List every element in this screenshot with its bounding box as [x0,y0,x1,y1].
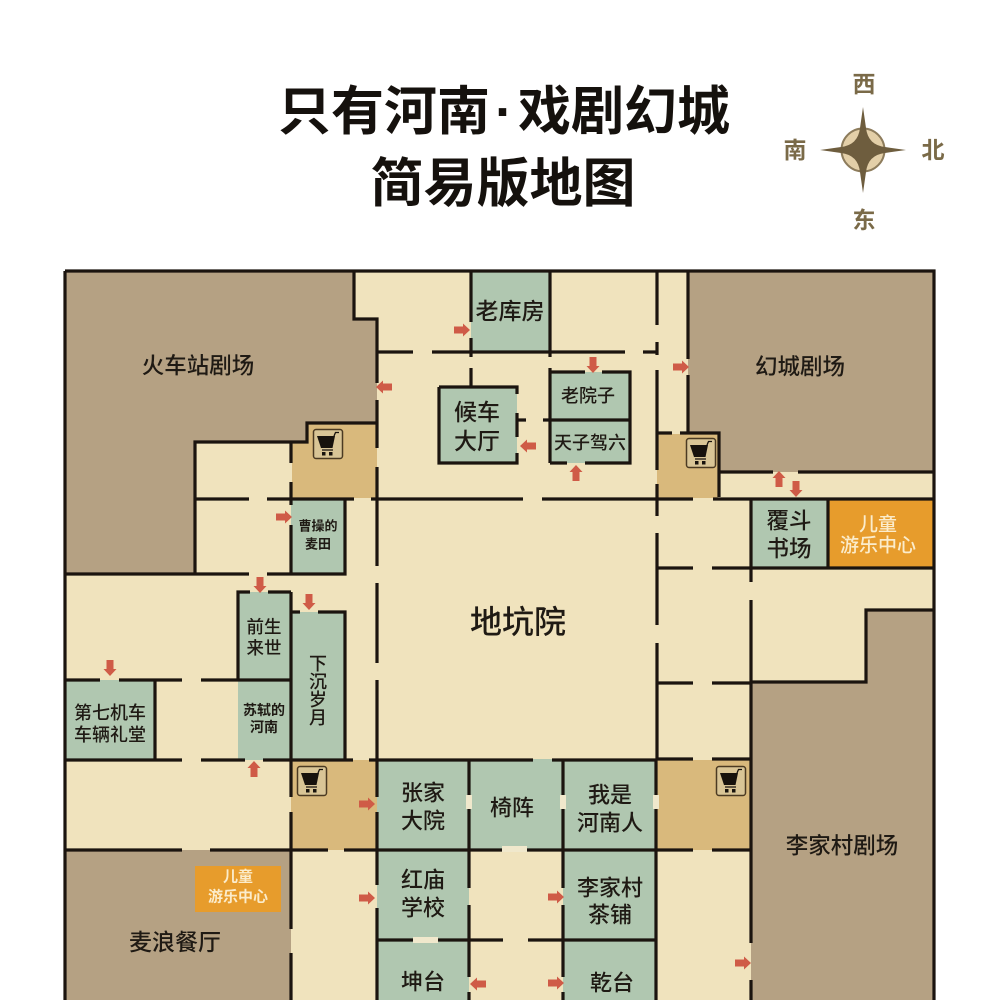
arrow: 张家大院 [359,798,375,810]
room: 李家村茶铺: 李家村 [577,876,643,900]
icon: cart north-west [314,430,342,458]
title: 简易版地图 [370,154,636,214]
shop area: south-east [657,760,751,850]
room: 张家大院: 大院 [401,808,445,834]
room: 下沉岁月: 下 [309,654,327,674]
room: 苏轼的河南 [238,680,291,760]
room: 老院子 [550,372,630,420]
panel: 火车站剧场 [65,271,377,574]
title: 只有河南 [278,82,490,142]
arrow: 幻城剧场 south [772,471,786,487]
icon: cart south-west [298,766,326,796]
room: 曹操的麦田: 曹操的 [298,518,338,534]
panel: 李家村剧场: 李家村剧场 [786,834,898,858]
room: 儿童游乐中心 east [828,499,934,568]
room: 李家村茶铺: 茶铺 [588,902,632,928]
room: 儿童游乐中心 east: 儿童 [859,514,897,536]
arrow: 火车站剧场 [376,380,392,394]
icon: cart south-east [716,766,746,796]
room: 乾台 [563,940,656,1000]
room: 覆斗书场: 书场 [766,536,812,562]
room: 前生来世: 来世 [246,638,282,658]
arrow: 红庙学校 [359,892,375,904]
room: 候车大厅 [439,387,517,463]
room: 儿童游乐中心 west: 游乐中心 [208,888,268,906]
arrow: 天子驾六 [570,465,582,481]
room: 我是河南人: 河南人 [577,810,643,836]
room: 第七机车车辆礼堂: 车辆礼堂 [74,725,146,745]
compass: 东 [852,207,876,233]
panel: 幻城剧场: 幻城剧场 [755,354,845,380]
room: 老库房 [471,271,550,352]
arrow: 李家村茶铺 [548,890,564,904]
room: 下沉岁月: 沉 [309,672,327,692]
room: 天子驾六 [550,420,630,463]
room: 老院子: 老院子 [561,386,615,406]
arrow: 第七机车 [104,660,116,676]
room: 地坑院: 地坑院 [470,604,566,640]
arrow: 老院子 [586,357,600,373]
room: 天子驾六: 天子驾六 [554,433,626,453]
room: 红庙学校: 学校 [401,896,445,920]
room: 儿童游乐中心 west [195,866,281,912]
arrow: 坤台 [470,978,486,990]
title [278,82,730,214]
room: 乾台: 乾台 [590,970,634,996]
room: 下沉岁月: 月 [309,708,327,728]
title: · [495,82,513,142]
room: 张家大院 [377,759,469,849]
arrow: 候车大厅 [520,440,536,452]
arrow: 老库房 [454,324,470,336]
icon: cart north-east [686,438,716,468]
panel: 火车站剧场: 火车站剧场 [142,354,254,378]
room: 坤台 [377,940,469,1000]
room: 曹操的麦田: 麦田 [305,536,331,552]
arrow: 苏轼的河南 [248,761,260,777]
panel: 幻城剧场 [688,271,934,472]
panel: 李家村剧场 [751,610,934,1000]
room: 张家大院: 张家 [401,780,445,806]
room: 曹操的麦田 [291,499,345,574]
room: 第七机车车辆礼堂 [65,680,155,760]
arrow: 覆斗书场 [790,481,802,497]
room: 苏轼的河南: 苏轼的 [243,702,285,718]
arrow: 乾台 [548,976,564,990]
compass: 西 [852,71,876,97]
door highlights [413,795,659,943]
room: 前生来世: 前生 [246,617,282,637]
room: 儿童游乐中心 east: 游乐中心 [840,534,916,556]
title: 戏剧幻城 [518,82,730,142]
room: 我是河南人 [563,759,656,849]
room: 下沉岁月: 岁 [309,690,327,710]
room: 椅阵 [469,759,563,849]
room: 老库房: 老库房 [476,298,544,324]
walls [65,271,934,1000]
panel: 麦浪餐厅: 麦浪餐厅 [129,929,221,955]
arrow: 李家村剧场 [735,956,751,970]
room: 第七机车车辆礼堂: 第七机车 [74,703,146,723]
room: 苏轼的河南: 河南 [250,719,278,735]
arrow: 前生来世 [254,577,266,593]
room: 覆斗书场 [751,499,828,568]
room: 红庙学校: 红庙 [401,868,445,892]
panel: 麦浪餐厅 [65,850,291,1000]
arrow: 曹操的麦田 [276,510,292,524]
shop area: north-east [657,434,718,498]
compass: 南 [784,137,806,163]
room: 覆斗书场: 覆斗 [766,508,812,534]
shop area: north-west [292,424,377,498]
room: 候车大厅: 大厅 [454,428,500,454]
compass [784,71,944,233]
arrow: 幻城剧场 [673,360,689,374]
room: 李家村茶铺 [563,849,656,940]
room: 前生来世 [238,592,291,680]
room: 红庙学校 [377,849,469,940]
compass: 北 [922,137,944,163]
shop area: south-west [291,760,377,850]
room: 候车大厅: 候车 [454,399,500,425]
arrows: entrance markers [104,324,802,990]
room: 下沉岁月 [291,612,345,760]
room: 椅阵: 椅阵 [490,796,534,820]
room: 儿童游乐中心 west: 儿童 [223,868,253,886]
map floor [65,271,934,1000]
room: 坤台: 坤台 [401,970,445,994]
arrow: 下沉岁月 [302,594,316,610]
room: 我是河南人: 我是 [588,782,632,808]
